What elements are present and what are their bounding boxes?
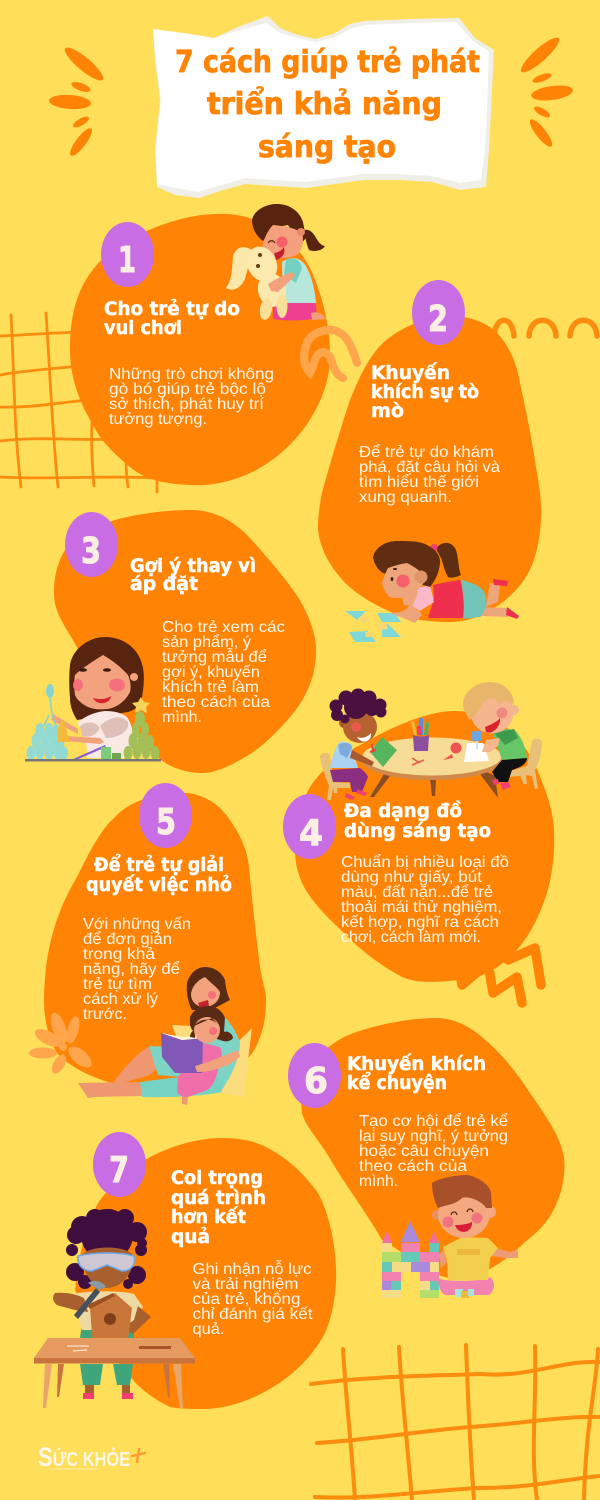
body 6: Tạo cơ hội để trẻ kể xyxy=(359,1112,508,1130)
body 3: khích trẻ làm xyxy=(162,679,259,696)
body 7: của trẻ, không xyxy=(192,1291,300,1308)
body 3: mình. xyxy=(162,709,202,726)
body 7: Ghi nhận nỗ lực xyxy=(192,1259,312,1278)
heading 1: vui chơi xyxy=(104,317,182,339)
heading 7: hơn kết xyxy=(171,1205,246,1228)
blob 6 xyxy=(301,1018,565,1279)
blob 1 xyxy=(70,214,330,485)
badge 5: 5 xyxy=(156,802,176,843)
chair right xyxy=(507,738,542,789)
heading 1 xyxy=(104,298,240,339)
legs xyxy=(112,1047,166,1086)
panel 5 xyxy=(29,783,266,1105)
heading 7: Coi trọng xyxy=(171,1167,263,1189)
heading 7: quả xyxy=(171,1226,210,1248)
badge 6: 6 xyxy=(304,1061,328,1102)
heading 4: dùng sáng tạo xyxy=(344,820,491,842)
body 2 xyxy=(359,443,500,506)
body 5: năng, hãy để xyxy=(83,960,180,978)
arches decoration xyxy=(494,320,597,336)
body 3: gợi ý, khuyến xyxy=(162,664,260,681)
body 6: mình. xyxy=(359,1173,398,1190)
body 4: màu, đất nặn...để trẻ xyxy=(341,883,493,901)
panel 7 xyxy=(34,1132,336,1409)
body 7: chỉ đánh giá kết xyxy=(192,1306,313,1323)
book xyxy=(161,1033,203,1073)
body 2: tìm hiểu thế giới xyxy=(359,473,479,491)
body 1: sở thích, phát huy trí xyxy=(109,396,265,413)
panel 1 xyxy=(70,204,330,485)
badge 1 xyxy=(101,222,154,287)
heading 3 xyxy=(130,555,256,595)
panel 3 xyxy=(25,510,316,773)
heading 7: quá trình xyxy=(171,1187,266,1209)
title text: triển khả năng xyxy=(207,86,442,122)
panel 6 xyxy=(288,1018,565,1298)
body 3: theo cách của xyxy=(162,694,270,711)
body 3: tưởng mẫu để xyxy=(162,647,267,666)
title text: sáng tạo xyxy=(258,130,396,165)
heading 4 xyxy=(344,799,491,842)
body 3: Cho trẻ xem các xyxy=(162,619,285,636)
heading 2: khích sự tò xyxy=(371,381,479,403)
swirl decoration xyxy=(304,330,357,378)
heading 7 xyxy=(171,1167,266,1248)
body 6: lại suy nghĩ, ý tưởng xyxy=(359,1128,508,1145)
body 5: trước. xyxy=(83,1006,127,1023)
body 5: cách xử lý xyxy=(83,991,158,1008)
body 2: xung quanh. xyxy=(359,489,452,506)
body 1 xyxy=(109,366,274,428)
heading 2 xyxy=(371,361,479,422)
badge 6 xyxy=(288,1043,341,1108)
badge 3 xyxy=(65,512,118,577)
body 4: thoải mái thử nghiệm, xyxy=(341,899,502,916)
body 6: theo cách của xyxy=(359,1158,467,1175)
child body xyxy=(177,1043,222,1098)
badge 4: 4 xyxy=(299,813,323,854)
badge 7 xyxy=(93,1132,146,1197)
illustration: girl lying with puzzle xyxy=(345,541,519,642)
title text: 7 cách giúp trẻ phát xyxy=(175,45,480,80)
zigzag decoration xyxy=(460,944,541,1003)
logo: SỨC KHỎE xyxy=(38,1442,130,1472)
body 5: Với những vấn xyxy=(83,916,191,933)
heading 6: Khuyến khích xyxy=(347,1052,486,1075)
body 4: kết hợp, nghĩ ra cách xyxy=(341,914,499,931)
burst lines right xyxy=(517,33,574,149)
heading 3: Gợi ý thay vì xyxy=(130,555,256,577)
blob 4 xyxy=(295,711,554,982)
blob 3 xyxy=(54,510,316,773)
badge 7: 7 xyxy=(109,1150,129,1191)
burst lines left xyxy=(49,43,107,159)
illustration: girl hugging bunny xyxy=(226,204,326,321)
body 2: Để trẻ tự do khám xyxy=(359,443,494,461)
torn paper xyxy=(153,16,494,198)
heading 4: Đa dạng đồ xyxy=(344,799,462,822)
title panel xyxy=(153,16,494,198)
illustration: child building birdhouse xyxy=(34,1209,195,1408)
body 1: Những trò chơi không xyxy=(109,366,274,383)
illustration: boy with blocks xyxy=(382,1175,518,1298)
illustration: mother and child reading xyxy=(78,967,252,1105)
body 5: trong khả xyxy=(83,946,155,963)
heading 1: Cho trẻ tự do xyxy=(104,298,240,320)
pillow xyxy=(172,1025,252,1097)
blob 7 xyxy=(75,1138,336,1409)
body 4 xyxy=(341,853,509,946)
body 4: chơi, cách làm mới. xyxy=(341,929,481,946)
illustration: kids at table xyxy=(320,682,542,800)
body 6: hoặc câu chuyện xyxy=(359,1143,489,1160)
body 5 xyxy=(83,916,191,1023)
chair left xyxy=(320,753,350,800)
badge 2 xyxy=(412,280,465,345)
badge 4 xyxy=(283,794,336,859)
heading 5 xyxy=(86,853,232,896)
heading 6 xyxy=(347,1052,486,1094)
badge 1: 1 xyxy=(118,240,136,281)
heading 5: Để trẻ tự giải xyxy=(94,853,224,876)
heading 6: kể chuyện xyxy=(347,1071,447,1094)
body 4: Chuẩn bị nhiều loại đồ xyxy=(341,853,509,871)
heading 2: Khuyến xyxy=(371,361,450,384)
body 5: trẻ tự tìm xyxy=(83,976,152,993)
body 1: gò bó giúp trẻ bộc lộ xyxy=(109,381,266,398)
body 3 xyxy=(162,619,285,726)
grid decoration bottom right xyxy=(311,1345,600,1500)
body 7: và trải nghiệm xyxy=(192,1276,298,1293)
blob 5 xyxy=(44,793,266,1088)
mother xyxy=(195,1017,240,1090)
blob 2 xyxy=(318,315,541,622)
title text xyxy=(175,45,480,165)
body 2: phá, đặt câu hỏi và xyxy=(359,459,500,476)
flower decoration xyxy=(29,1011,95,1076)
heading 2: mò xyxy=(371,400,404,422)
body 6 xyxy=(359,1112,508,1190)
badge 5 xyxy=(139,783,192,848)
grid decoration top left xyxy=(0,313,157,492)
body 7: quả. xyxy=(192,1321,224,1338)
heading 5: quyết việc nhỏ xyxy=(86,873,232,896)
body 1: tưởng tượng. xyxy=(109,411,207,428)
child head xyxy=(190,1006,233,1041)
panel 4 xyxy=(283,682,554,982)
panel 2 xyxy=(318,280,541,642)
body 4: dùng như giấy, bút xyxy=(341,869,483,886)
badge 3: 3 xyxy=(81,531,101,572)
body 5: để đơn giản xyxy=(83,930,172,948)
body 7 xyxy=(192,1259,313,1338)
badge 2: 2 xyxy=(428,299,448,340)
heading 3: áp đặt xyxy=(130,573,198,595)
body 3: sản phẩm, ý xyxy=(162,633,251,651)
illustration: girl with spoon trees xyxy=(25,637,161,762)
